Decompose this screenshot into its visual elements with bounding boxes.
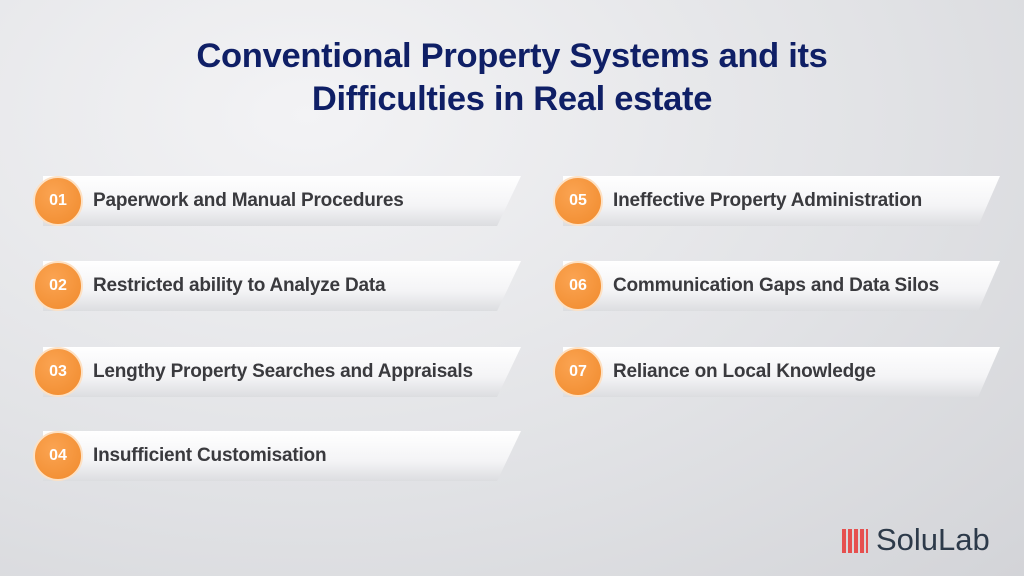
item 03 — [33, 347, 521, 397]
item 06 — [553, 261, 1000, 311]
item 07 — [553, 347, 1000, 397]
item 04: Insufficient Customisation — [93, 445, 326, 466]
item 07: 07 — [569, 363, 587, 380]
item 06: 06 — [569, 277, 587, 294]
title — [196, 37, 828, 118]
item 03: Lengthy Property Searches and Appraisals — [93, 361, 473, 382]
item 05: 05 — [569, 192, 587, 209]
logo: SoluLab — [876, 522, 990, 557]
item 01: 01 — [49, 192, 67, 209]
title: Difficulties in Real estate — [312, 80, 712, 118]
item 01 — [33, 176, 521, 226]
item 02 — [33, 261, 521, 311]
item 05 — [553, 176, 1000, 226]
item 04 — [33, 431, 521, 481]
item 03: 03 — [49, 363, 67, 380]
item 02: Restricted ability to Analyze Data — [93, 275, 385, 296]
icon: logo mark — [842, 529, 868, 553]
item 04: 04 — [49, 447, 67, 464]
item 05: Ineffective Property Administration — [613, 190, 922, 211]
item 01: Paperwork and Manual Procedures — [93, 190, 404, 211]
item 06: Communication Gaps and Data Silos — [613, 275, 939, 296]
item 07: Reliance on Local Knowledge — [613, 361, 876, 382]
title: Conventional Property Systems and its — [196, 37, 828, 75]
item 02: 02 — [49, 277, 67, 294]
